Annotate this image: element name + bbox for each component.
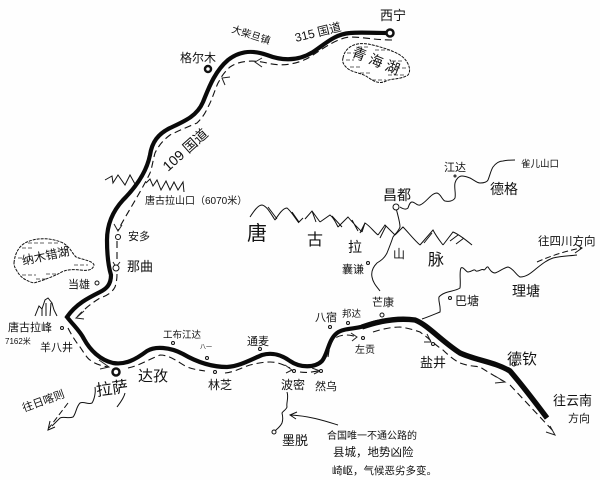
- place labels: 脉: [428, 251, 444, 269]
- arrow from Medog note: [290, 412, 338, 425]
- place labels: 109 国道: [159, 125, 211, 174]
- place labels: 古: [307, 231, 323, 249]
- route arrowheads: [76, 58, 555, 435]
- place labels: 芒康: [372, 295, 394, 309]
- place labels: 德钦: [507, 350, 537, 368]
- callout: Medog note: 合国唯一不通公路的: [327, 429, 417, 442]
- place labels: 拉萨: [95, 378, 129, 400]
- place labels: 波密: [281, 377, 305, 392]
- place labels: 方向: [568, 411, 590, 425]
- place labels: 往四川方向: [538, 234, 596, 248]
- place labels: 左贡: [355, 343, 375, 356]
- arrow toward Shigatse: [49, 403, 68, 428]
- place labels: 达孜: [138, 368, 168, 385]
- place labels: 德格: [490, 181, 518, 197]
- place labels: 拉: [348, 239, 362, 255]
- callout: Medog note: 县城，地势凶险: [333, 445, 414, 459]
- callout: Medog note: [327, 429, 437, 477]
- place labels: 羊八井: [40, 340, 73, 354]
- mountain: Tanggula peak: [35, 298, 57, 316]
- place labels: 然乌: [315, 379, 337, 393]
- place labels: 盐井: [420, 355, 446, 370]
- place labels: 往日喀则: [20, 387, 66, 415]
- place labels: 西宁: [380, 8, 406, 23]
- place labels: 八一: [200, 344, 212, 351]
- place labels: 唐古拉峰: [8, 320, 52, 334]
- callout: Medog note: 崎岖，气候恶劣多变。: [332, 464, 437, 477]
- mountains: near Tanggula pass: [105, 175, 184, 192]
- place labels: 囊谦: [342, 262, 364, 276]
- place labels: 雀儿山口: [521, 158, 559, 170]
- dashed direction arrow to Sichuan: [537, 248, 581, 262]
- lake: Qinghai Lake: [343, 44, 410, 82]
- place labels: 大柴旦镇: [230, 22, 272, 47]
- place labels: 当雄: [68, 277, 90, 291]
- city markers: [60, 30, 516, 434]
- lake: Namtso: 纳木错湖: [21, 243, 71, 268]
- place labels: 邦达: [342, 308, 362, 320]
- place labels: 安多: [128, 229, 150, 243]
- lake: Qinghai Lake: 青 海 湖: [350, 44, 402, 77]
- place labels: 林芝: [208, 377, 232, 392]
- place labels: 工布江达: [163, 329, 202, 341]
- place labels: 山: [393, 247, 405, 261]
- place labels: 唐: [247, 222, 267, 245]
- place labels: 那曲: [127, 259, 153, 274]
- place labels: 昌都: [383, 187, 411, 203]
- mountains: Tanggula range: [250, 205, 472, 245]
- place labels: 格尔木: [180, 50, 216, 65]
- place labels: 7162米: [5, 336, 31, 346]
- place labels: 江达: [444, 161, 466, 174]
- place labels: 墨脱: [282, 433, 308, 448]
- place labels: 巴塘: [455, 293, 479, 308]
- place labels: 315 国道: [293, 20, 343, 45]
- place labels: 通麦: [247, 335, 269, 348]
- rivers and side roads: [52, 160, 577, 431]
- place labels: 唐古拉山口（6070米）: [145, 194, 247, 207]
- place labels: 往云南: [553, 393, 592, 408]
- lake: Namtso: [14, 239, 94, 283]
- place labels: 理塘: [512, 283, 540, 299]
- place labels: 八宿: [315, 310, 337, 324]
- main road: thick highway line: [67, 33, 547, 418]
- dashed route line with direction: [68, 37, 555, 433]
